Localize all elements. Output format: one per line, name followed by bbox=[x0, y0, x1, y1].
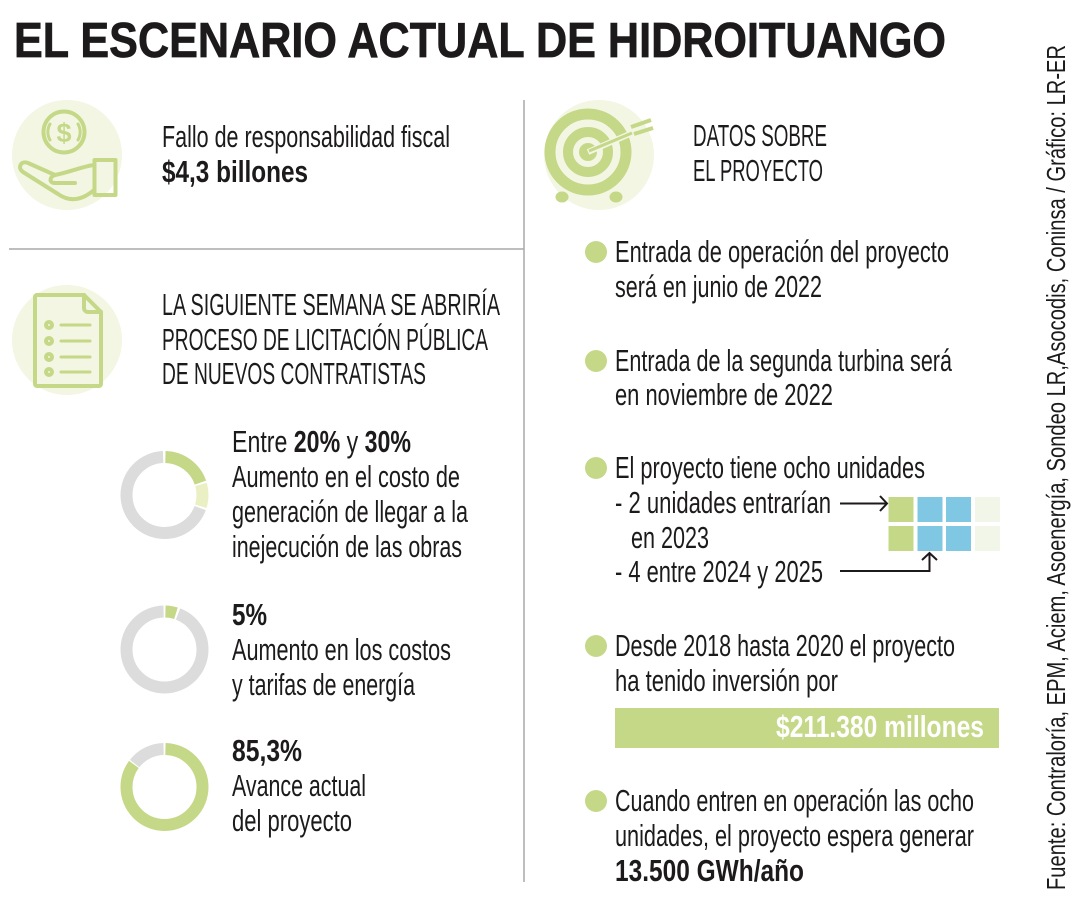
bullet: eight units: - 2 unidades entrarían bbox=[615, 485, 831, 520]
bar: investment amount: $211.380 millones bbox=[776, 709, 984, 744]
text: fiscal ruling: $4,3 billones bbox=[162, 154, 308, 189]
text: generation cost increase: Entre 20% y 30% bbox=[232, 424, 411, 459]
bullet: investment bbox=[585, 628, 955, 698]
bullet: expected generation: 13.500 GWh/año bbox=[615, 853, 804, 888]
bullet: second turbine: en noviembre de 2022 bbox=[615, 377, 833, 412]
icon: target with arrow bbox=[544, 100, 654, 210]
text: generation cost increase: Aumento en el costo de bbox=[232, 459, 460, 494]
arrow: 2 units bbox=[840, 496, 887, 511]
heading: tender process: PROCESO DE LICITACIÓN PÚBLICA bbox=[162, 322, 488, 357]
heading: tender process: LA SIGUIENTE SEMANA SE ABRIRÍA bbox=[162, 287, 500, 322]
arrow: 4 units bbox=[840, 553, 937, 571]
text: energy rates increase: y tarifas de energía bbox=[232, 667, 416, 702]
heading: tender process bbox=[162, 287, 500, 391]
text: generation cost increase: generación de llegar a la bbox=[232, 494, 469, 529]
donut chart: 5% bbox=[126, 612, 202, 688]
text: generation cost increase bbox=[232, 424, 469, 564]
icon: hand with coin: $ bbox=[56, 118, 72, 148]
panel: public tender bbox=[12, 285, 500, 838]
heading: tender process: DE NUEVOS CONTRATISTAS bbox=[162, 356, 426, 391]
text: project progress bbox=[232, 733, 366, 838]
bar: investment amount bbox=[615, 708, 999, 748]
text: project progress: Avance actual bbox=[232, 768, 366, 803]
text: generation cost increase: inejecución de las obras bbox=[232, 529, 462, 564]
bullet: eight units: El proyecto tiene ocho unidades bbox=[615, 450, 925, 485]
text: energy rates increase: 5% bbox=[232, 597, 267, 632]
text: fiscal ruling bbox=[162, 119, 450, 189]
donut chart: 20% to 30% bbox=[126, 457, 202, 533]
bullet: eight units: en 2023 bbox=[631, 520, 709, 555]
bullet: second turbine bbox=[585, 343, 953, 412]
heading: project data: DATOS SOBRE bbox=[693, 118, 827, 153]
bullet: investment: ha tenido inversión por bbox=[615, 663, 838, 698]
donut chart: 85.3% bbox=[126, 749, 202, 825]
bullet: start of operation: será en junio de 2022 bbox=[615, 269, 822, 304]
bullet: start of operation bbox=[585, 234, 949, 304]
bullet: expected generation bbox=[585, 783, 974, 888]
text: project progress: 85,3% bbox=[232, 733, 302, 768]
heading: project data: EL PROYECTO bbox=[693, 153, 823, 188]
title: EL ESCENARIO ACTUAL DE HIDROITUANGO bbox=[14, 14, 946, 68]
heading: project data bbox=[693, 118, 827, 188]
chart: eight unit squares bbox=[888, 497, 1000, 551]
text: energy rates increase: Aumento en los costos bbox=[232, 632, 451, 667]
panel: fiscal responsibility bbox=[12, 100, 450, 210]
bullet: eight units: - 4 entre 2024 y 2025 bbox=[615, 554, 823, 589]
text: fiscal ruling: Fallo de responsabilidad fiscal bbox=[162, 119, 450, 154]
bullet: start of operation: Entrada de operación del proyecto bbox=[615, 234, 949, 269]
panel: project data bbox=[544, 100, 1000, 888]
icon: document checklist bbox=[12, 285, 122, 395]
text: project progress: del proyecto bbox=[232, 803, 352, 838]
text: energy rates increase bbox=[232, 597, 451, 702]
bullet: eight units bbox=[585, 450, 925, 589]
icon: hand with coin bbox=[12, 100, 122, 210]
